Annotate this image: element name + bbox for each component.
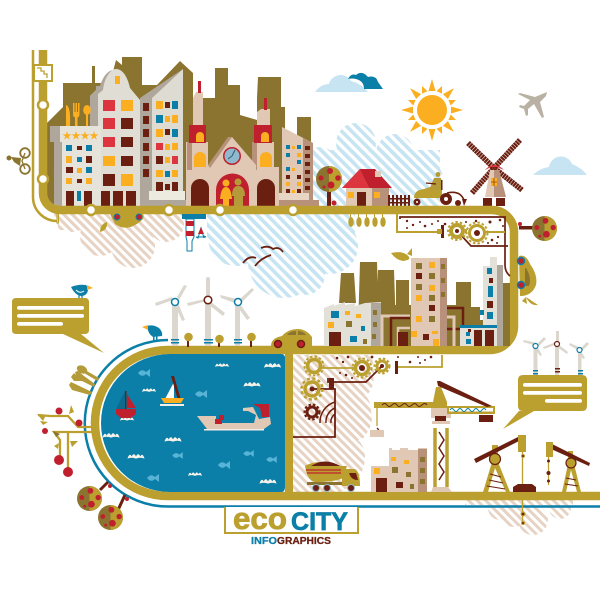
- oil pump jack left: [474, 435, 536, 525]
- subtitle infographics: GRAPHICS: [277, 535, 331, 547]
- wooden fence: [388, 195, 410, 206]
- small wind turbines on bubble: [523, 331, 589, 375]
- factory pipes: [382, 308, 463, 346]
- apple branch tree: [37, 405, 93, 477]
- city skyline silhouette: [47, 57, 311, 206]
- apple tree by the house: [316, 166, 342, 206]
- tall gabled building: [90, 69, 140, 206]
- main rail road: [33, 50, 600, 506]
- cloud right: [533, 157, 587, 175]
- tan apartment tower: [411, 258, 447, 346]
- cloud dark blue: [348, 73, 383, 89]
- wind turbines: [155, 277, 254, 346]
- lake with boats: [101, 354, 285, 492]
- speech bubble left: [12, 298, 104, 353]
- white sailboat: [160, 376, 184, 406]
- bottle and wine glass icon: [182, 214, 206, 251]
- factory district: [324, 257, 510, 346]
- logo word city: CITY: [291, 508, 348, 536]
- logo word eco: eco: [233, 501, 287, 536]
- church with clock and family: [186, 81, 279, 206]
- construction crane: [370, 381, 495, 492]
- red sailboat: [116, 391, 136, 418]
- windmill: [468, 140, 522, 206]
- flock of birds: [243, 247, 283, 266]
- gears and pipes upper: [397, 214, 510, 276]
- wheat row under the rail: [348, 214, 386, 227]
- tipper truck: [305, 462, 360, 492]
- car on right rail: [518, 256, 538, 305]
- cargo ship: [197, 404, 271, 430]
- hatched beige clouds: [54, 196, 573, 535]
- four star rating: ★★★★: [62, 131, 99, 142]
- car on pool top: [271, 329, 312, 348]
- white tower with teal band: [460, 257, 503, 346]
- blue bird on bubble: [71, 285, 93, 298]
- subtitle infographics: [251, 535, 331, 547]
- icon: stairs sign: [34, 65, 52, 81]
- oil pump jack right: [546, 442, 590, 492]
- icon: restaurant cutlery: [66, 103, 91, 126]
- hotel building: [50, 103, 101, 206]
- tree on right rail: [518, 216, 557, 241]
- apple trees lower left: [77, 482, 129, 530]
- grey factory building: [324, 302, 381, 346]
- cloud light blue: [315, 75, 368, 92]
- angled roof apartment block: [140, 69, 187, 206]
- blue bird on arc: [142, 325, 162, 341]
- icon: cyclist: [6, 148, 30, 174]
- small trees on arc: [184, 333, 256, 347]
- rail station markers: [38, 100, 298, 215]
- house with red roof: [342, 169, 392, 206]
- cutlery icons left of arc: [69, 364, 99, 395]
- hatched blue clouds behind the city: [207, 123, 443, 298]
- car under rail: [100, 214, 144, 232]
- lower gears and pipes: [293, 355, 442, 437]
- logo frame: [225, 507, 358, 533]
- icon: airplane: [518, 92, 547, 118]
- factory chimneys: [339, 262, 497, 346]
- icon: family figures: [220, 178, 245, 206]
- fish: [138, 369, 277, 482]
- farmer on tractor: [414, 172, 467, 206]
- small sloped roof building: [279, 127, 319, 206]
- subtitle infographics: INFO: [251, 535, 277, 547]
- waves: [102, 363, 281, 484]
- icon: clock: [223, 147, 241, 165]
- speech bubble right: [503, 375, 587, 429]
- leaf above factory: [391, 248, 412, 261]
- title: eco city logo: [225, 501, 358, 536]
- sun: [401, 79, 463, 141]
- building under construction: [371, 448, 427, 492]
